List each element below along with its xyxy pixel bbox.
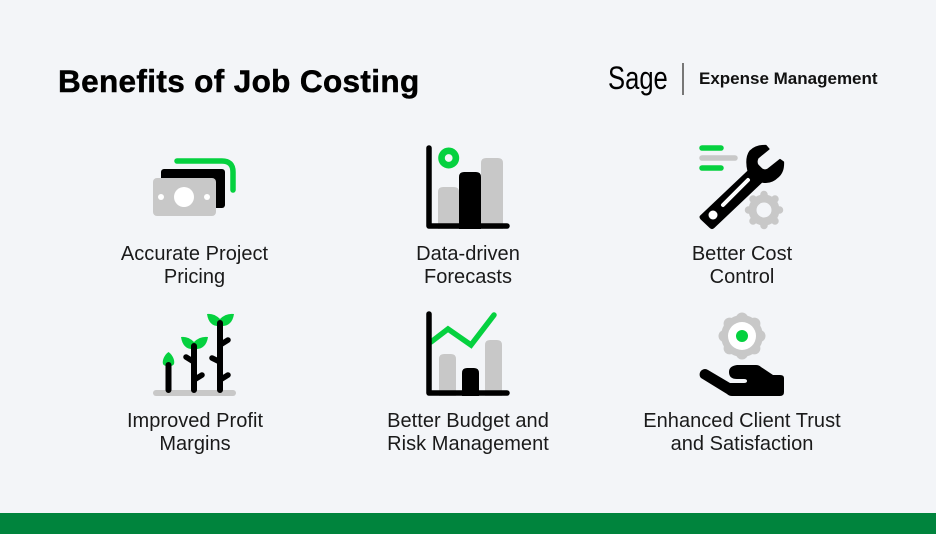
label: Data-driven Forecasts <box>416 243 520 288</box>
label: Improved Profit Margins: Improved Profit <box>127 410 263 432</box>
label: Better Cost Control: Control <box>710 266 774 288</box>
footer band <box>0 513 936 534</box>
label: Enhanced Client Trust and Satisfaction <box>643 410 841 455</box>
logo divider <box>682 63 684 95</box>
icon: hand holding flower <box>700 312 784 396</box>
icon: banknotes <box>153 161 233 216</box>
label: Accurate Project Pricing: Pricing <box>164 266 225 288</box>
title: Benefits of Job Costing <box>58 63 420 99</box>
logo product name: Expense Management <box>699 69 878 88</box>
label: Enhanced Client Trust and Satisfaction: Enhanced Client Trust <box>643 410 841 432</box>
icon: growing plants <box>156 314 234 393</box>
label: Better Cost Control <box>692 243 792 288</box>
logo wordmark: Sage <box>608 60 668 96</box>
icon: wrench and gear <box>700 145 784 228</box>
label: Better Budget and Risk Management: Risk Management <box>387 433 549 455</box>
label: Data-driven Forecasts: Forecasts <box>424 266 512 288</box>
label: Accurate Project Pricing: Accurate Project <box>121 243 268 265</box>
logo: Sage Expense Management <box>608 60 878 96</box>
label: Data-driven Forecasts: Data-driven <box>416 243 520 265</box>
icon: bar chart with target <box>429 148 507 229</box>
label: Enhanced Client Trust and Satisfaction: and Satisfaction <box>671 433 813 455</box>
label: Better Cost Control: Better Cost <box>692 243 792 265</box>
icon: line and bar chart <box>429 314 507 396</box>
label: Accurate Project Pricing <box>121 243 268 288</box>
label: Better Budget and Risk Management: Better Budget and <box>387 410 549 432</box>
label: Better Budget and Risk Management <box>387 410 549 455</box>
label: Improved Profit Margins <box>127 410 263 455</box>
label: Improved Profit Margins: Margins <box>159 433 231 455</box>
